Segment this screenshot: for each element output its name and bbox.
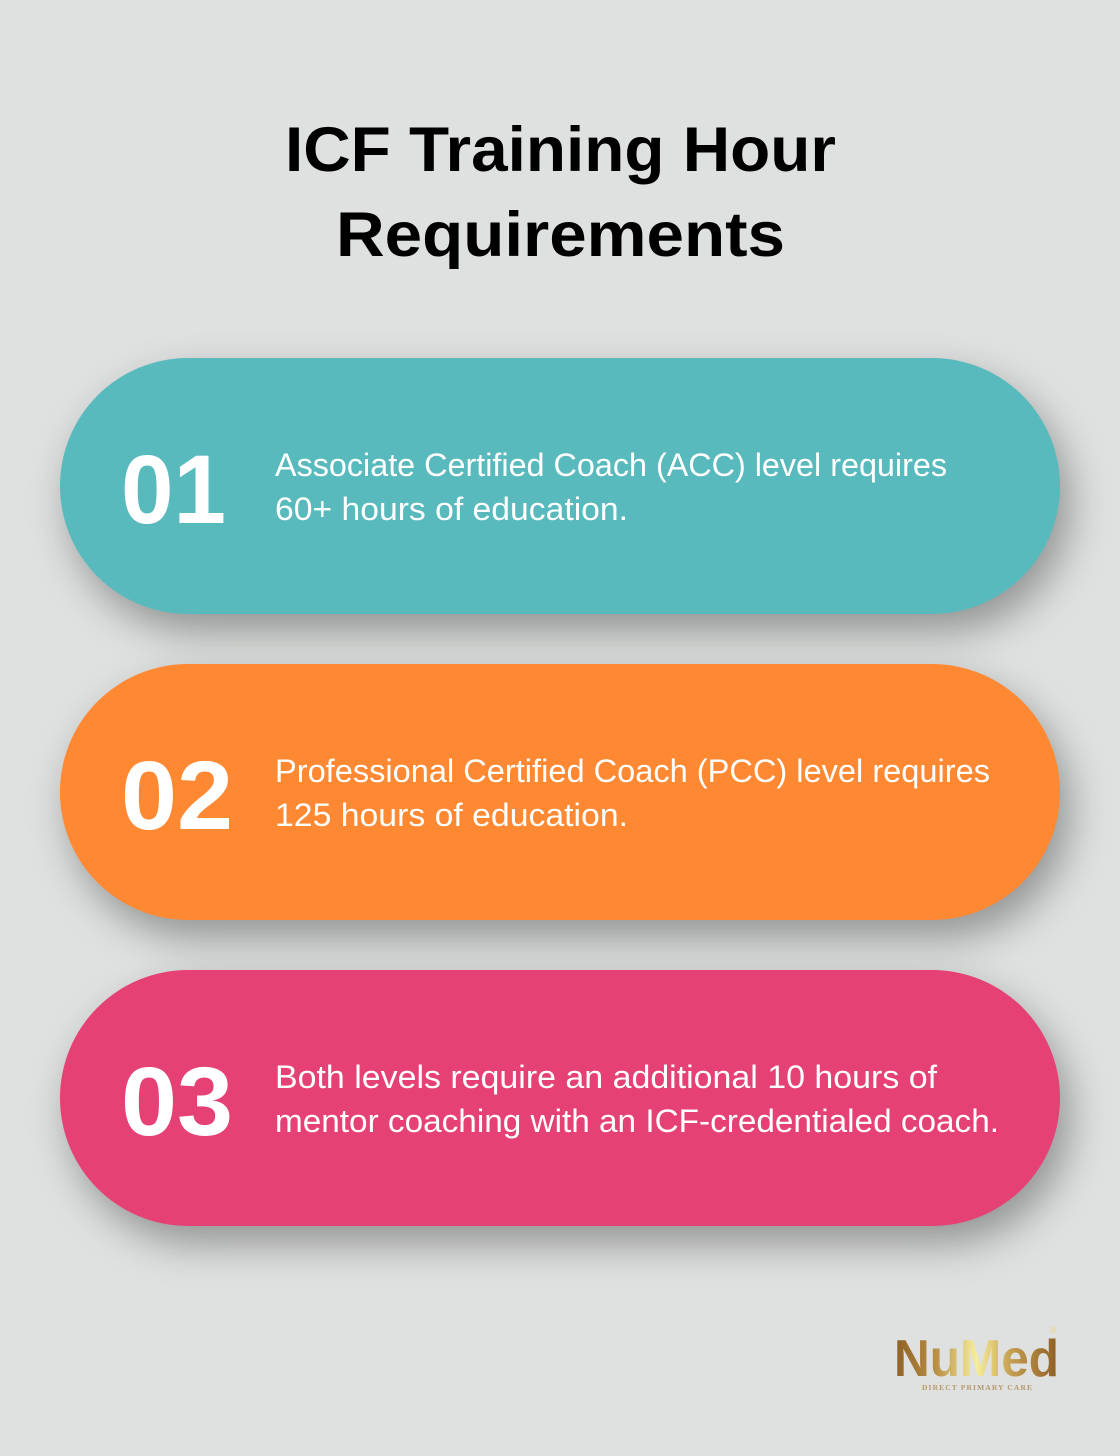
step 1 content: 01 (121, 435, 226, 544)
step 3 content: mentor coaching with an ICF-credentialed coach. (275, 1103, 999, 1139)
step 1 content (121, 435, 947, 544)
step 1 content: 60+ hours of education. (275, 491, 628, 527)
logo: NuMed: NuMed (894, 1330, 1059, 1388)
title: Requirements (336, 200, 785, 270)
panel: step 1 pill (60, 358, 1060, 614)
step 2 content (121, 741, 990, 850)
step 3 content (121, 1047, 999, 1156)
panel: step 2 pill (60, 664, 1060, 920)
step 1 content: Associate Certified Coach (ACC) level requires (275, 447, 947, 483)
step 2 content: 02 (121, 741, 233, 850)
step 2 content: 125 hours of education. (275, 797, 628, 833)
step 3 content: 03 (121, 1047, 233, 1156)
logo: NuMed: DIRECT PRIMARY CARE (922, 1383, 1032, 1392)
title (285, 115, 836, 270)
title: ICF Training Hour (285, 115, 836, 185)
step 3 content: Both levels require an additional 10 hours of (275, 1059, 937, 1095)
step 2 content: Professional Certified Coach (PCC) level requires (275, 753, 990, 789)
panel: step 3 pill (60, 970, 1060, 1226)
